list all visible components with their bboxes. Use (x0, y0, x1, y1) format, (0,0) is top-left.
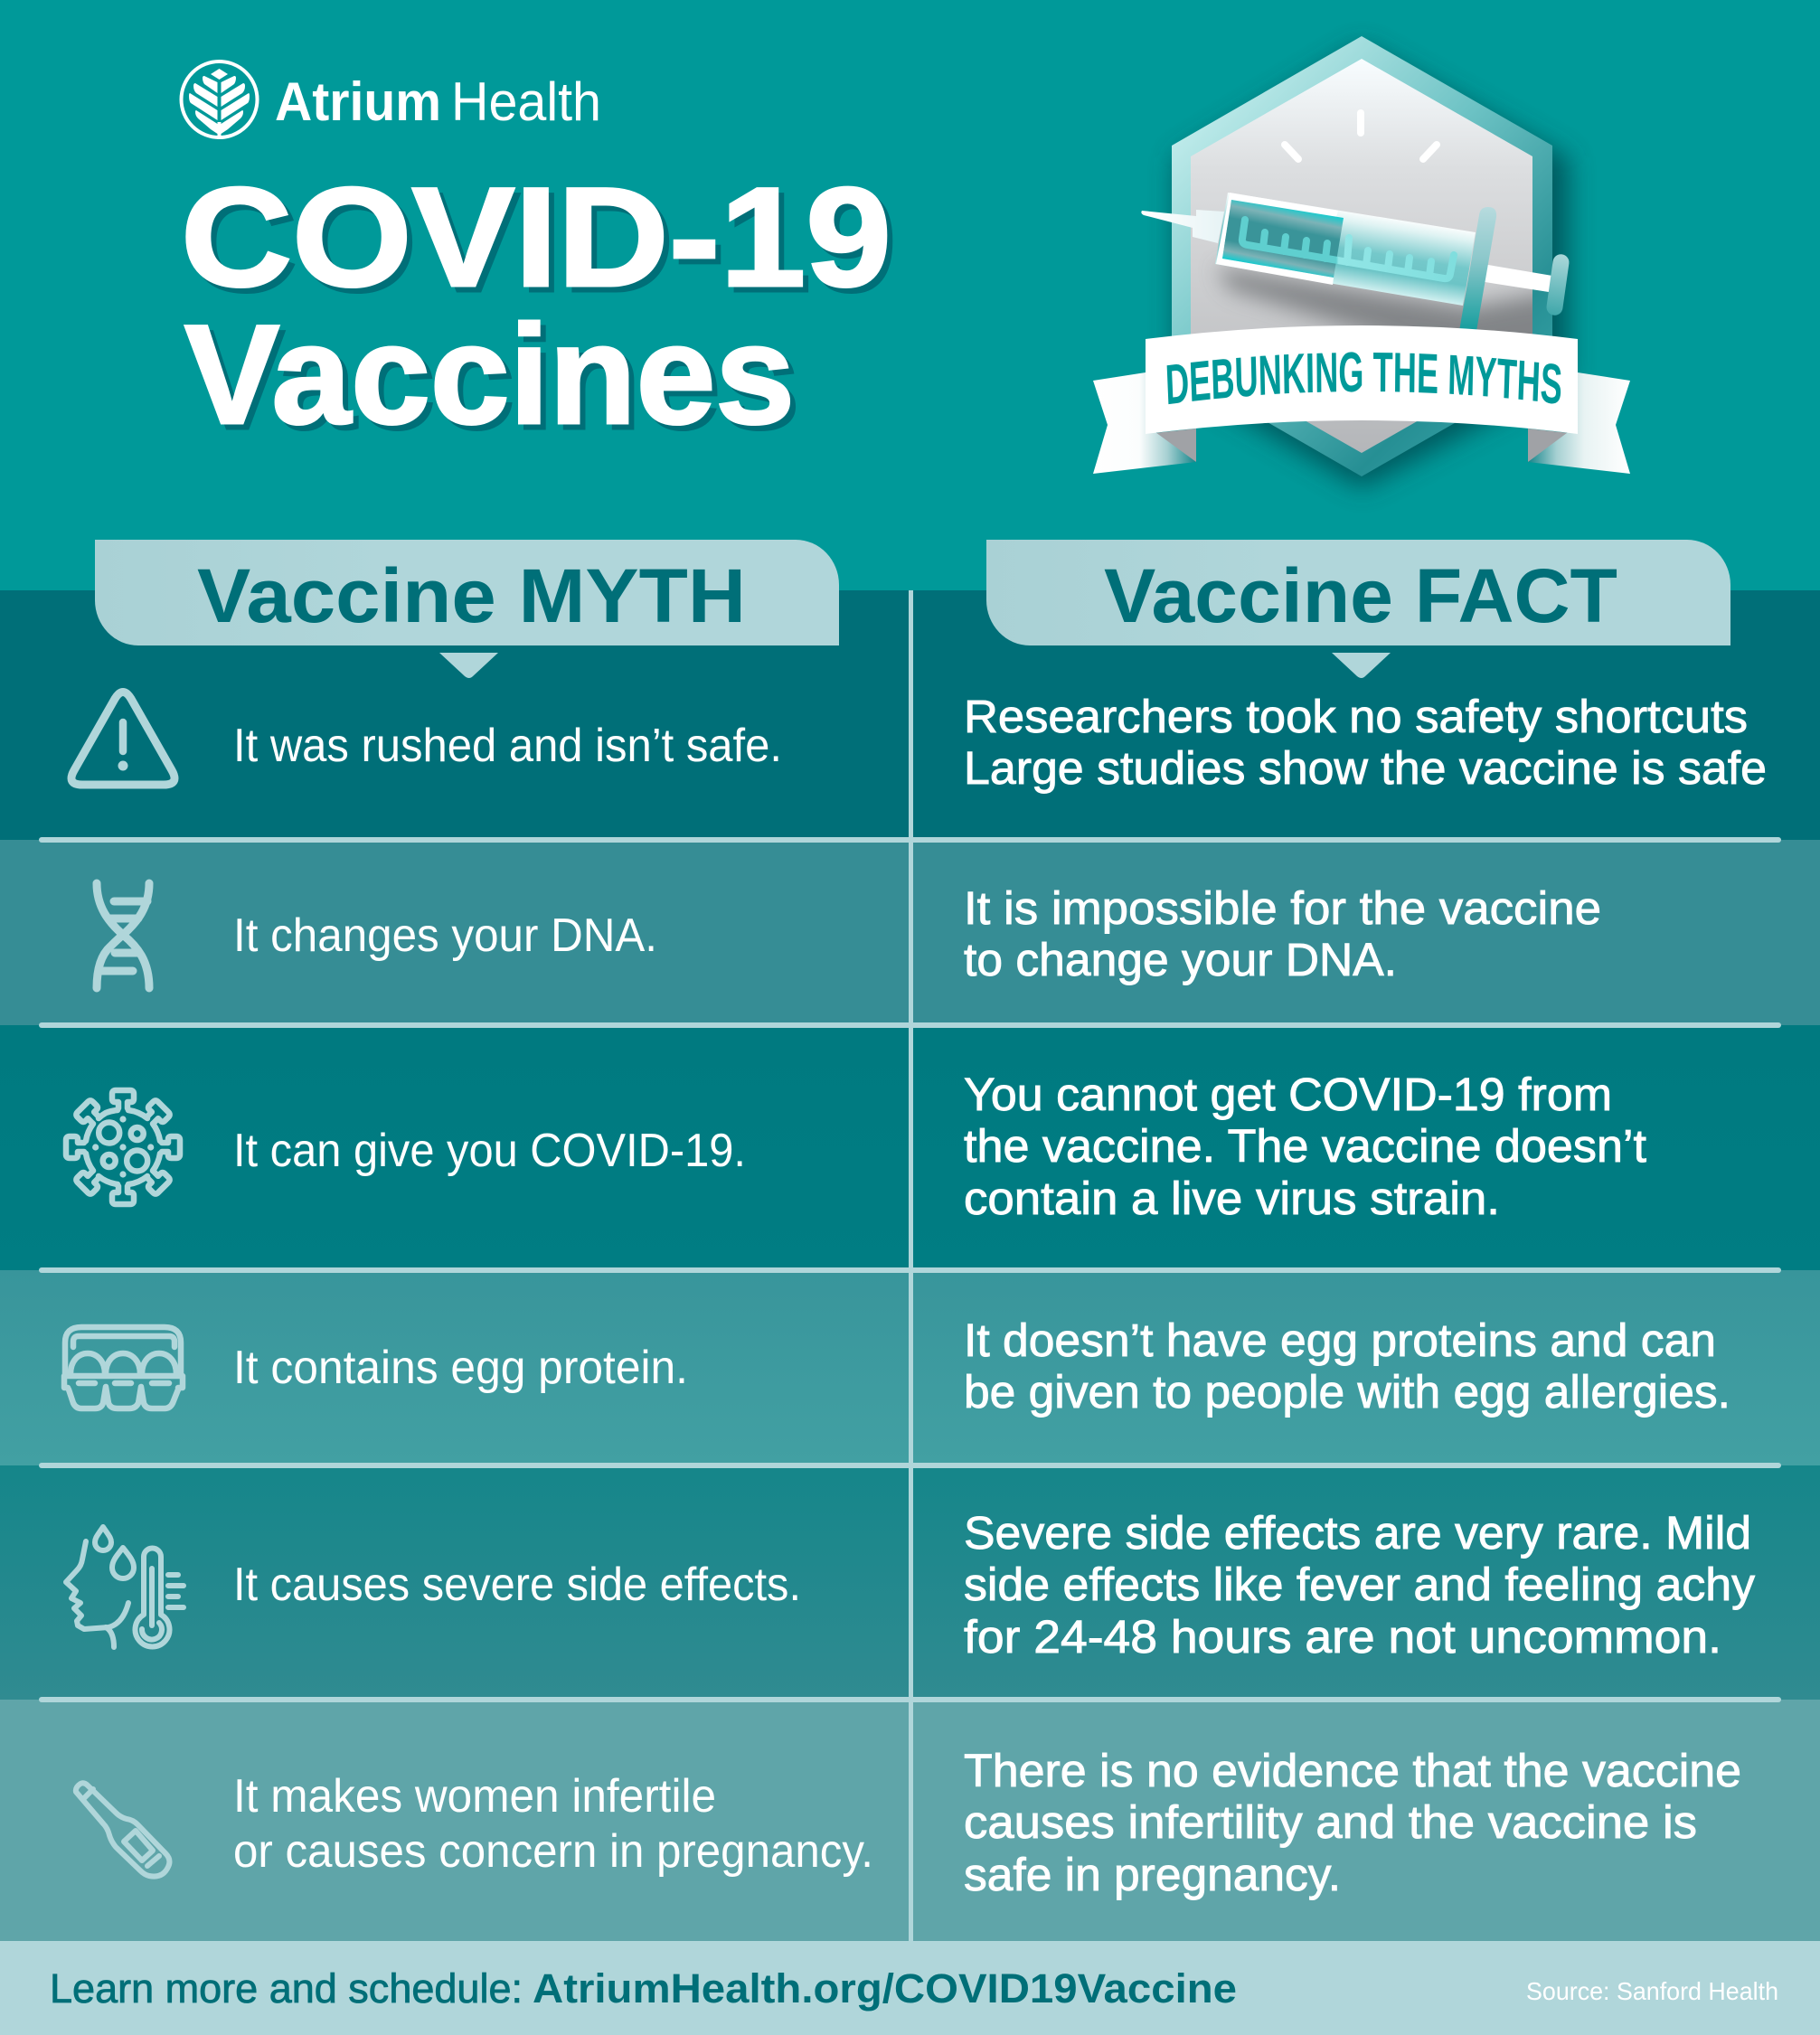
title (181, 159, 891, 454)
fact text (964, 1069, 1646, 1224)
myth text: It causes severe side effects. (233, 1559, 801, 1611)
fact text (964, 1745, 1741, 1900)
graduation scale (1242, 220, 1454, 278)
icon: leaf emblem (181, 61, 257, 139)
row 3: gives COVID (0, 1025, 1820, 1270)
header tab: Vaccine FACT (986, 540, 1730, 678)
fluid (1222, 200, 1344, 278)
myth text: It was rushed and isn’t safe. (233, 720, 782, 772)
fact text: It doesn’t have egg proteins and can (964, 1314, 1716, 1366)
footer (0, 1941, 1820, 2035)
fact text (964, 1314, 1730, 1418)
fact text: Large studies show the vaccine is safe (964, 742, 1767, 794)
header tab: Vaccine MYTH (95, 540, 839, 678)
icon: face with fever (66, 1527, 184, 1647)
title: COVID-19 (181, 159, 891, 316)
fact text: contain a live virus strain. (964, 1173, 1500, 1224)
myth text: It can give you COVID-19. (233, 1125, 746, 1177)
fact text: side effects like fever and feeling achy (964, 1559, 1756, 1610)
fact text (964, 691, 1767, 794)
fact text (964, 1507, 1756, 1663)
ribbon (1093, 325, 1630, 474)
syringe shadow on panel (1212, 264, 1532, 334)
call to action (50, 1965, 1237, 2011)
syringe (1141, 193, 1570, 336)
row 1: rushed (0, 590, 1820, 840)
call to action: Learn more and schedule: (50, 1965, 523, 2011)
row 2: DNA (0, 840, 1820, 1025)
hexagon frame (1172, 36, 1552, 476)
arrow (439, 653, 498, 678)
fact text: the vaccine. The vaccine doesn’t (964, 1120, 1646, 1172)
spark ticks (1285, 113, 1437, 159)
fact text: You cannot get COVID-19 from (964, 1069, 1612, 1120)
hexagon inner panel (1191, 59, 1532, 453)
header tab: Vaccine FACT: Vaccine FACT (1104, 553, 1617, 638)
flange (1458, 207, 1496, 336)
myth text (233, 1770, 873, 1878)
myth text: or causes concern in pregnancy. (233, 1825, 873, 1878)
fact text: safe in pregnancy. (964, 1849, 1341, 1900)
myth text: It changes your DNA. (233, 909, 657, 962)
wordmark (275, 71, 601, 132)
needle and hub (1141, 210, 1224, 243)
myth text: It contains egg protein. (233, 1342, 688, 1394)
icon: virus (66, 1090, 180, 1204)
icon: warning triangle (71, 692, 174, 785)
plunger head (1545, 253, 1570, 316)
fact text: It is impossible for the vaccine (964, 882, 1601, 934)
fact text: causes infertility and the vaccine is (964, 1796, 1697, 1848)
header tab: Vaccine MYTH: Vaccine MYTH (197, 553, 746, 638)
fact text: Severe side effects are very rare. Mild (964, 1507, 1751, 1559)
fact text: Researchers took no safety shortcuts (964, 691, 1748, 742)
ribbon tails (1093, 372, 1196, 474)
fact text: There is no evidence that the vaccine (964, 1745, 1741, 1796)
row 4: egg protein (0, 1270, 1820, 1465)
icon: digital thermometer (76, 1783, 169, 1877)
row 6: infertility (0, 1700, 1820, 1941)
teal background (0, 0, 1820, 590)
fact text: to change your DNA. (964, 934, 1397, 985)
source note: Source: Sanford Health (1526, 1977, 1778, 2005)
icon: DNA helix (97, 883, 149, 988)
fact text: be given to people with egg allergies. (964, 1366, 1730, 1418)
call to action: AtriumHealth.org/COVID19Vaccine (533, 1965, 1237, 2011)
ribbon band (1146, 325, 1578, 434)
wordmark: Health (451, 71, 601, 132)
row 5: side effects (0, 1465, 1820, 1700)
fact text: for 24-48 hours are not uncommon. (964, 1611, 1721, 1663)
title: Vaccines (184, 297, 795, 454)
plunger rod (1479, 264, 1552, 292)
logo: Atrium Health (181, 61, 601, 139)
fact text (964, 882, 1601, 985)
wordmark: Atrium (275, 71, 441, 132)
arrow (1332, 653, 1391, 678)
myth text: It makes women infertile (233, 1770, 716, 1823)
badge shadow (1175, 45, 1569, 488)
barrel (1215, 193, 1476, 306)
ribbon folds (1146, 429, 1196, 462)
badge: debunking the myths (1093, 36, 1630, 497)
ribbon text: DEBUNKING THE MYTHS (1166, 352, 1561, 405)
icon: egg carton (64, 1327, 183, 1408)
